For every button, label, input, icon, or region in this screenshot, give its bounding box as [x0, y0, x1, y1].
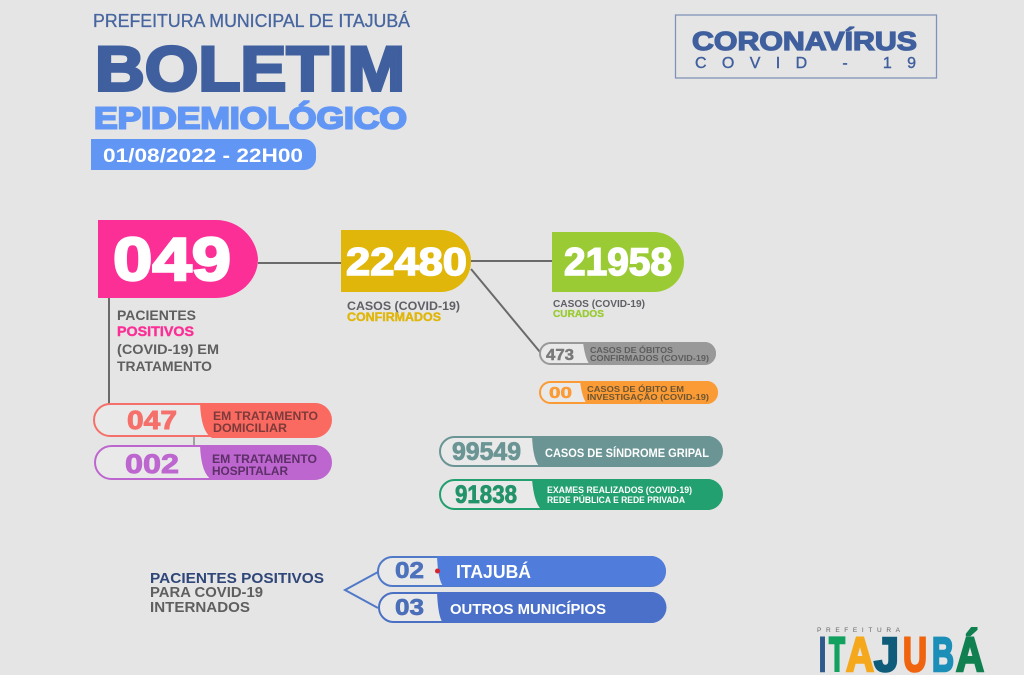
title: boletim: BOLETIM	[95, 34, 405, 104]
pill: 047 tratamento domiciliar: DOMICILIAR	[213, 423, 288, 435]
pill: 002 tratamento hospitalar: HOSPITALAR	[212, 466, 289, 478]
bracket arrow	[345, 572, 378, 608]
card: 049 pacientes positivos	[98, 220, 258, 298]
label: casos curados: CURADOS	[553, 309, 604, 320]
label: pacientes positivos em tratamento	[117, 307, 219, 374]
logo: prefeitura itajubá: PREFEITURA	[817, 627, 901, 634]
connector lines	[109, 261, 552, 445]
pill: 002 tratamento hospitalar: 002	[125, 449, 179, 479]
label: pacientes internados: INTERNADOS	[150, 599, 250, 616]
pill: 02 itajubá	[378, 556, 666, 586]
label: pacientes positivos em tratamento: POSITIVOS	[117, 323, 194, 339]
pill: 473 óbitos confirmados: CASOS DE ÓBITOS	[590, 346, 674, 355]
pill: 002 tratamento hospitalar: EM TRATAMENTO	[212, 454, 317, 466]
card: 21958 curados: 21958	[564, 241, 672, 284]
pill: 473 óbitos confirmados	[540, 342, 716, 365]
logo: prefeitura itajubá	[817, 627, 984, 675]
label: pacientes positivos em tratamento: PACIENTES	[117, 307, 196, 323]
pill: 03 outros municípios: 03	[395, 594, 424, 620]
coronavirus badge: COVID - 19	[695, 55, 916, 72]
subtitle: epidemiológico: EPIDEMIOLÓGICO	[94, 100, 407, 136]
label: casos curados	[553, 299, 645, 320]
pill: 02 itajubá: 02	[395, 557, 424, 583]
pill: 00 óbito em investigação: INVESTIGAÇÃO (COVID-19)	[587, 393, 709, 402]
date badge	[91, 139, 316, 170]
label: pacientes internados: PACIENTES POSITIVOS	[150, 570, 324, 587]
date badge: 01/08/2022 - 22H00	[103, 146, 303, 167]
pill: 91838 exames realizados: EXAMES REALIZADOS (COVID-19)	[547, 485, 692, 495]
pill: 00 óbito em investigação: CASOS DE ÓBITO EM	[587, 385, 684, 394]
label: casos confirmados: CASOS (COVID-19)	[347, 301, 460, 313]
label: casos confirmados	[347, 301, 460, 324]
label: casos curados: CASOS (COVID-19)	[553, 299, 645, 310]
pill: 02 itajubá: ITAJUBÁ	[456, 561, 531, 582]
pill: 99549 síndrome gripal: 99549	[452, 438, 521, 466]
card: 22480 confirmados: 22480	[346, 241, 467, 284]
pill: 91838 exames realizados: 91838	[455, 481, 517, 509]
label: pacientes positivos em tratamento: TRATAMENTO	[117, 358, 212, 374]
pill: 03 outros municípios	[379, 592, 666, 623]
pill: 91838 exames realizados: REDE PÚBLICA E REDE PRIVADA	[547, 494, 685, 505]
pill: 047 tratamento domiciliar	[94, 403, 332, 438]
label: pacientes internados	[150, 570, 324, 616]
pill: 99549 síndrome gripal: CASOS DE SÍNDROME GRIPAL	[545, 447, 709, 460]
card: 21958 curados	[552, 232, 684, 292]
label: pacientes internados: PARA COVID-19	[150, 584, 263, 601]
pill: 047 tratamento domiciliar: EM TRATAMENTO	[213, 411, 318, 423]
coronavirus badge	[676, 15, 936, 78]
pill: 00 óbito em investigação	[540, 381, 718, 404]
label: casos confirmados: CONFIRMADOS	[347, 312, 441, 324]
label: pacientes positivos em tratamento: (COVID-19) EM	[117, 341, 219, 357]
pill: 473 óbitos confirmados: 473	[546, 347, 574, 364]
pill: 047 tratamento domiciliar: 047	[127, 405, 177, 435]
pill: 002 tratamento hospitalar	[95, 445, 332, 480]
coronavirus badge: CORONAVÍRUS	[692, 26, 917, 56]
card: 049 pacientes positivos: 049	[113, 226, 231, 293]
pill: 99549 síndrome gripal	[440, 436, 722, 467]
pill: 473 óbitos confirmados: CONFIRMADOS (COVID-19)	[590, 354, 709, 363]
pill: 00 óbito em investigação: 00	[549, 385, 572, 402]
pill: 91838 exames realizados	[440, 479, 722, 510]
pill: 03 outros municípios: OUTROS MUNICÍPIOS	[450, 601, 606, 618]
card: 22480 confirmados	[341, 230, 471, 292]
header: municipality line: PREFEITURA MUNICIPAL DE ITAJUBÁ	[93, 11, 410, 31]
